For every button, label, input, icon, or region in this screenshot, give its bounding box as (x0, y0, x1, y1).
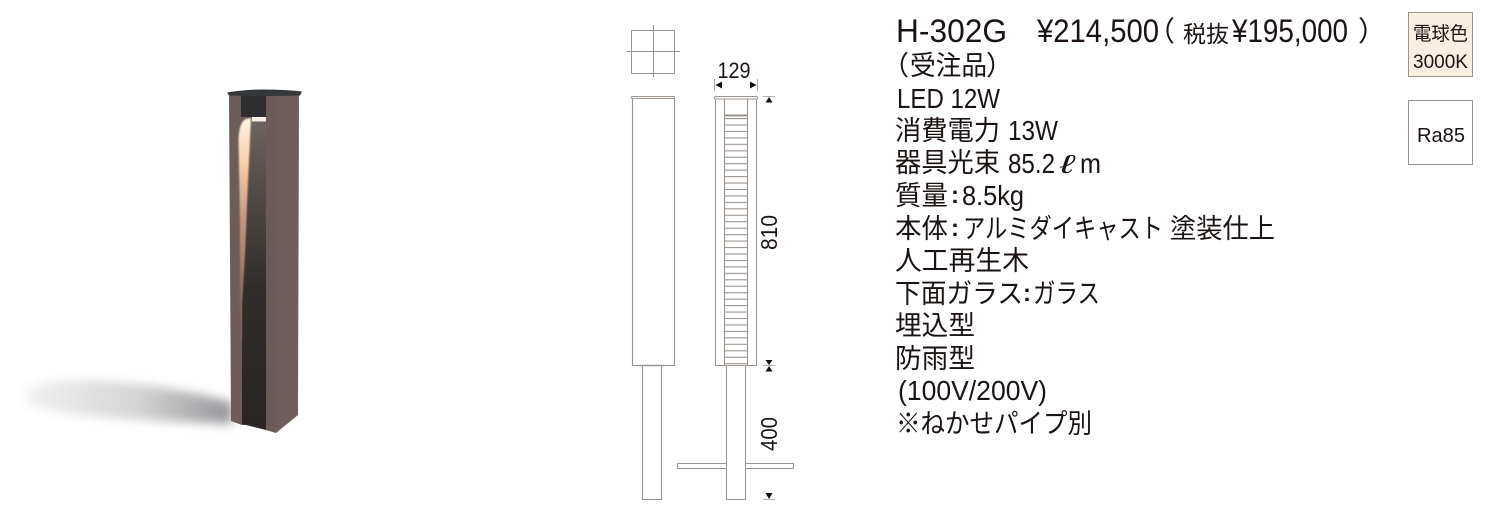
bollard right face (266, 95, 276, 433)
light highlight (252, 118, 266, 122)
body material: アルミダイキャスト (963, 214, 1163, 244)
power consumption (895, 115, 1058, 146)
rainproof: 防雨型 (895, 344, 975, 374)
glass: : (1023, 280, 1031, 307)
mass: 質量 (895, 181, 948, 211)
body material (895, 214, 1275, 244)
dimension: pipe 400: 400 (756, 417, 782, 451)
model and price (896, 13, 1386, 49)
badge: colour temperature: 電球色 (1413, 23, 1468, 45)
LED wattage: LED 12W (897, 83, 1000, 114)
power consumption: 消費電力 (895, 116, 1000, 146)
luminous flux: 85.2 (1008, 148, 1055, 179)
body material: : (951, 215, 959, 242)
front elevation (678, 96, 794, 500)
voltage: (100V/200V) (898, 375, 1047, 406)
luminous flux: m (1080, 148, 1101, 179)
specification text (882, 13, 1386, 439)
recycled wood: 人工再生木 (895, 246, 1029, 276)
dimension: height 810: 810 (756, 215, 782, 250)
plan view (627, 25, 680, 77)
model and price: H-302G (896, 13, 1007, 49)
luminous flux: 器具光束 (895, 148, 1000, 178)
dimension: width 129: 129 (718, 58, 750, 83)
model and price: （ (1147, 16, 1175, 47)
bollard dark panel (242, 118, 266, 430)
lit recess (238, 118, 251, 340)
badge: colour temperature: 3000K (1413, 52, 1468, 73)
glass (895, 279, 1100, 309)
model and price: ¥195,000 (1231, 13, 1348, 49)
glass: 下面ガラス (895, 279, 1023, 309)
pipe note: ※ねかせパイプ別 (896, 409, 1092, 439)
ground shadow (24, 380, 232, 424)
mass: : (951, 182, 959, 209)
order note: 受注品 (910, 51, 987, 81)
mass: 8.5kg (962, 180, 1024, 211)
product photo: bollard light (24, 90, 302, 433)
bollard left strip (229, 95, 252, 425)
luminous flux: ℓ (1058, 149, 1077, 179)
badge: colour temperature (1408, 12, 1472, 76)
order note: （ (882, 51, 909, 81)
bollard head block (241, 95, 266, 117)
order note (882, 51, 1013, 81)
glass: ガラス (1033, 279, 1100, 309)
model and price: ¥214,500 (1036, 13, 1159, 49)
power consumption: 13W (1008, 115, 1058, 146)
order note: ） (986, 51, 1013, 81)
mass (895, 180, 1024, 211)
embedded type: 埋込型 (895, 311, 975, 341)
luminous flux (895, 148, 1101, 179)
badge: colour rendering: Ra85 (1417, 125, 1465, 147)
body material: 塗装仕上 (1170, 214, 1275, 244)
body material: 本体 (895, 214, 948, 244)
side elevation (632, 96, 674, 500)
bollard cap (227, 90, 302, 96)
model and price: ） (1358, 16, 1386, 47)
dimension marks (714, 79, 775, 500)
badge: colour rendering (1408, 100, 1472, 164)
model and price: 税抜 (1183, 21, 1229, 47)
